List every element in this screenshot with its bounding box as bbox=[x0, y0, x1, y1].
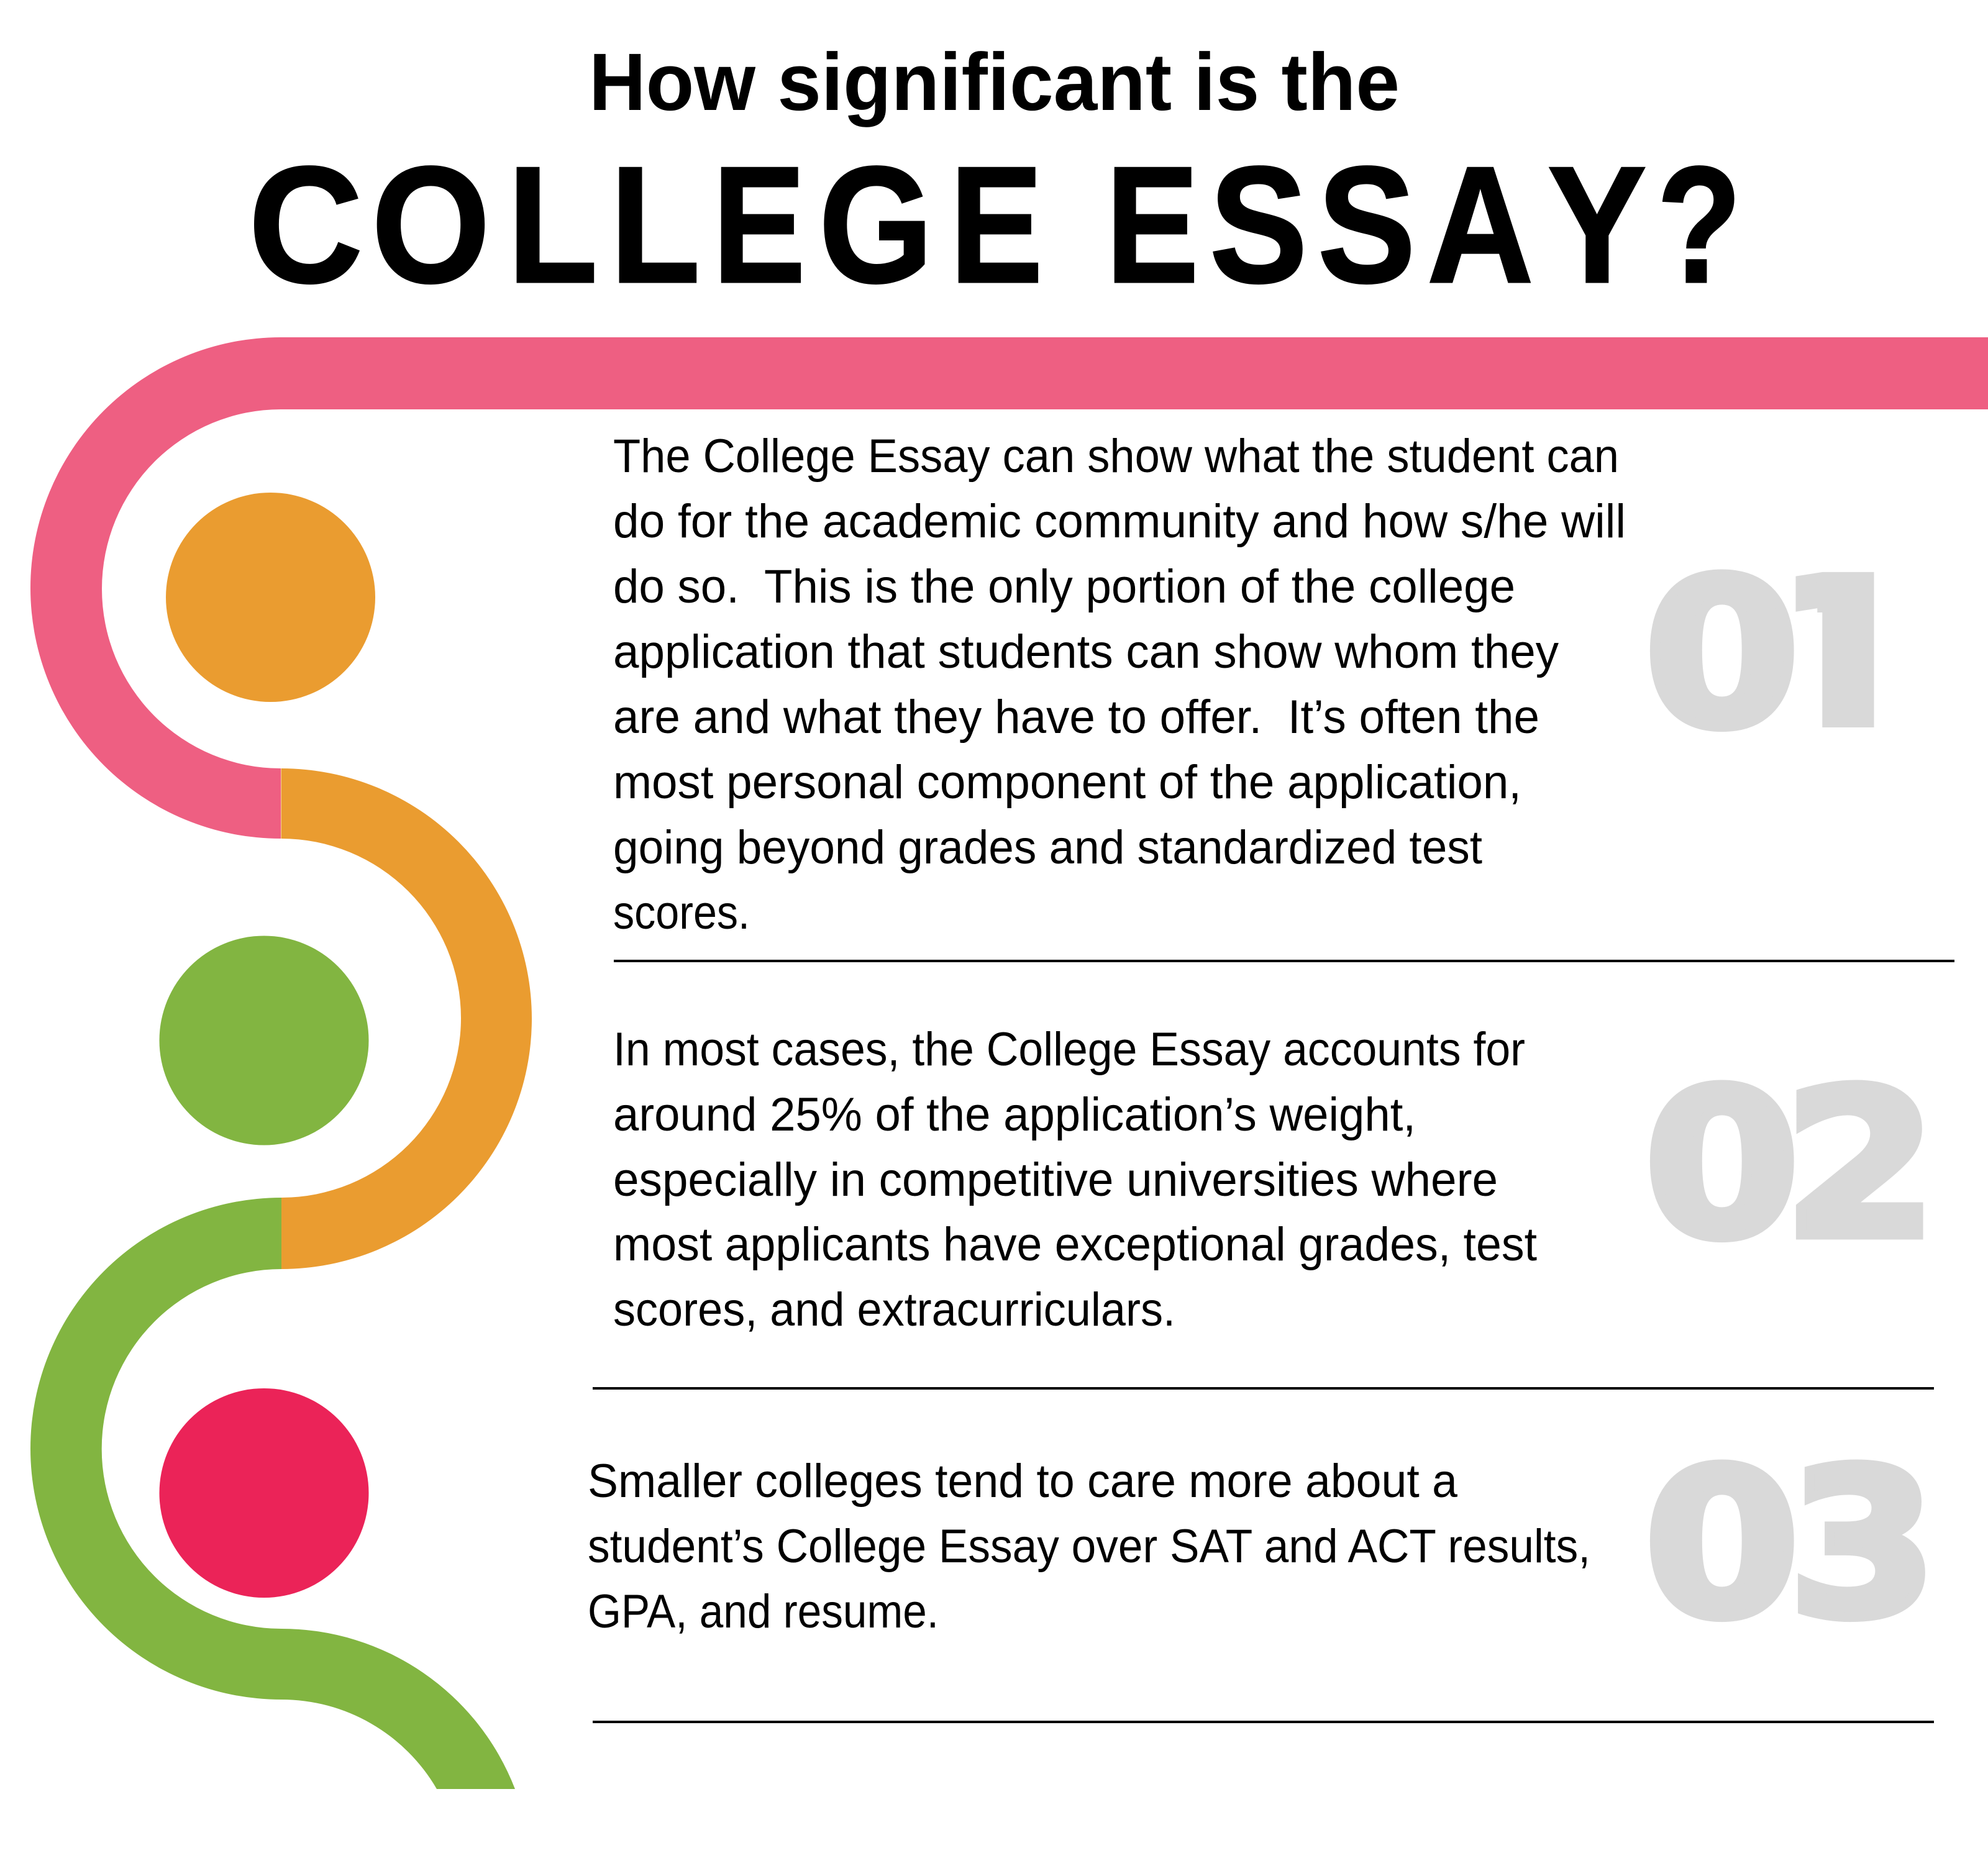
ribbon: green segment bbox=[30, 1198, 515, 1789]
text block: point 3 bbox=[588, 1455, 1590, 1638]
text block: point 2: most applicants have exceptional grades, test bbox=[613, 1218, 1537, 1271]
text block: point 3: Smaller colleges tend to care more about a bbox=[588, 1455, 1458, 1508]
ribbon: orange segment bbox=[281, 768, 532, 1269]
number 01: 0 bbox=[1644, 536, 1800, 772]
text block: point 1: most personal component of the application, bbox=[613, 756, 1521, 809]
title: second line: ? bbox=[1656, 132, 1741, 317]
text block: point 1: The College Essay can show what the student can bbox=[613, 430, 1619, 483]
text block: point 1: scores. bbox=[613, 886, 750, 939]
title: second line: S bbox=[1318, 132, 1416, 317]
title: second line: O bbox=[372, 132, 490, 317]
title: second line: E bbox=[1106, 132, 1199, 317]
text block: point 1: are and what they have to offer. It’s often the bbox=[613, 691, 1539, 744]
title: second line: L bbox=[610, 132, 700, 317]
title: second line: A bbox=[1427, 132, 1534, 317]
text block: point 3: GPA, and resume. bbox=[588, 1585, 939, 1638]
title: second line: E bbox=[713, 132, 806, 317]
divider 3 bbox=[593, 1721, 1934, 1723]
number 02: 2 bbox=[1784, 1047, 1937, 1283]
text block: point 1: application that students can show whom they bbox=[613, 626, 1559, 678]
icon: orange circle bbox=[166, 493, 375, 702]
title: second line: C bbox=[248, 132, 363, 317]
number 02: 0 bbox=[1644, 1047, 1800, 1283]
text block: point 2: In most cases, the College Essay accounts for bbox=[613, 1023, 1525, 1076]
text block: point 1: do so. This is the only portion of the college bbox=[613, 560, 1515, 613]
number 01: 1 bbox=[1748, 536, 1931, 772]
title: second line: S bbox=[1210, 132, 1307, 317]
icon: red circle bbox=[159, 1388, 369, 1598]
text block: point 3: student’s College Essay over SAT and ACT results, bbox=[588, 1520, 1590, 1573]
number 01 bbox=[1644, 536, 1874, 772]
title: second line bbox=[248, 132, 1741, 317]
text block: point 1: going beyond grades and standardized test bbox=[613, 821, 1482, 874]
title: second line: L bbox=[508, 132, 598, 317]
number 03: 3 bbox=[1789, 1426, 1937, 1662]
text block: point 2: especially in competitive universities where bbox=[613, 1154, 1498, 1206]
text block: point 2 bbox=[613, 1023, 1537, 1336]
divider 1 bbox=[614, 960, 1954, 962]
number 03 bbox=[1644, 1426, 1937, 1662]
text block: point 2: around 25% of the application’s weight, bbox=[613, 1088, 1416, 1141]
title: first line: How significant is the bbox=[589, 36, 1400, 127]
text block: point 1 bbox=[613, 430, 1626, 939]
text block: point 2: scores, and extracurriculars. bbox=[613, 1283, 1175, 1336]
text block: point 1: do for the academic community and how s/he will bbox=[613, 495, 1626, 548]
number 02 bbox=[1644, 1047, 1937, 1283]
ribbon: pink segment bbox=[30, 337, 1988, 839]
title: second line: G bbox=[819, 132, 933, 317]
number 03: 0 bbox=[1644, 1426, 1800, 1662]
divider 2 bbox=[593, 1387, 1934, 1390]
title: second line: Y bbox=[1548, 132, 1646, 317]
title: second line: E bbox=[950, 132, 1043, 317]
icon: green circle bbox=[159, 936, 369, 1145]
